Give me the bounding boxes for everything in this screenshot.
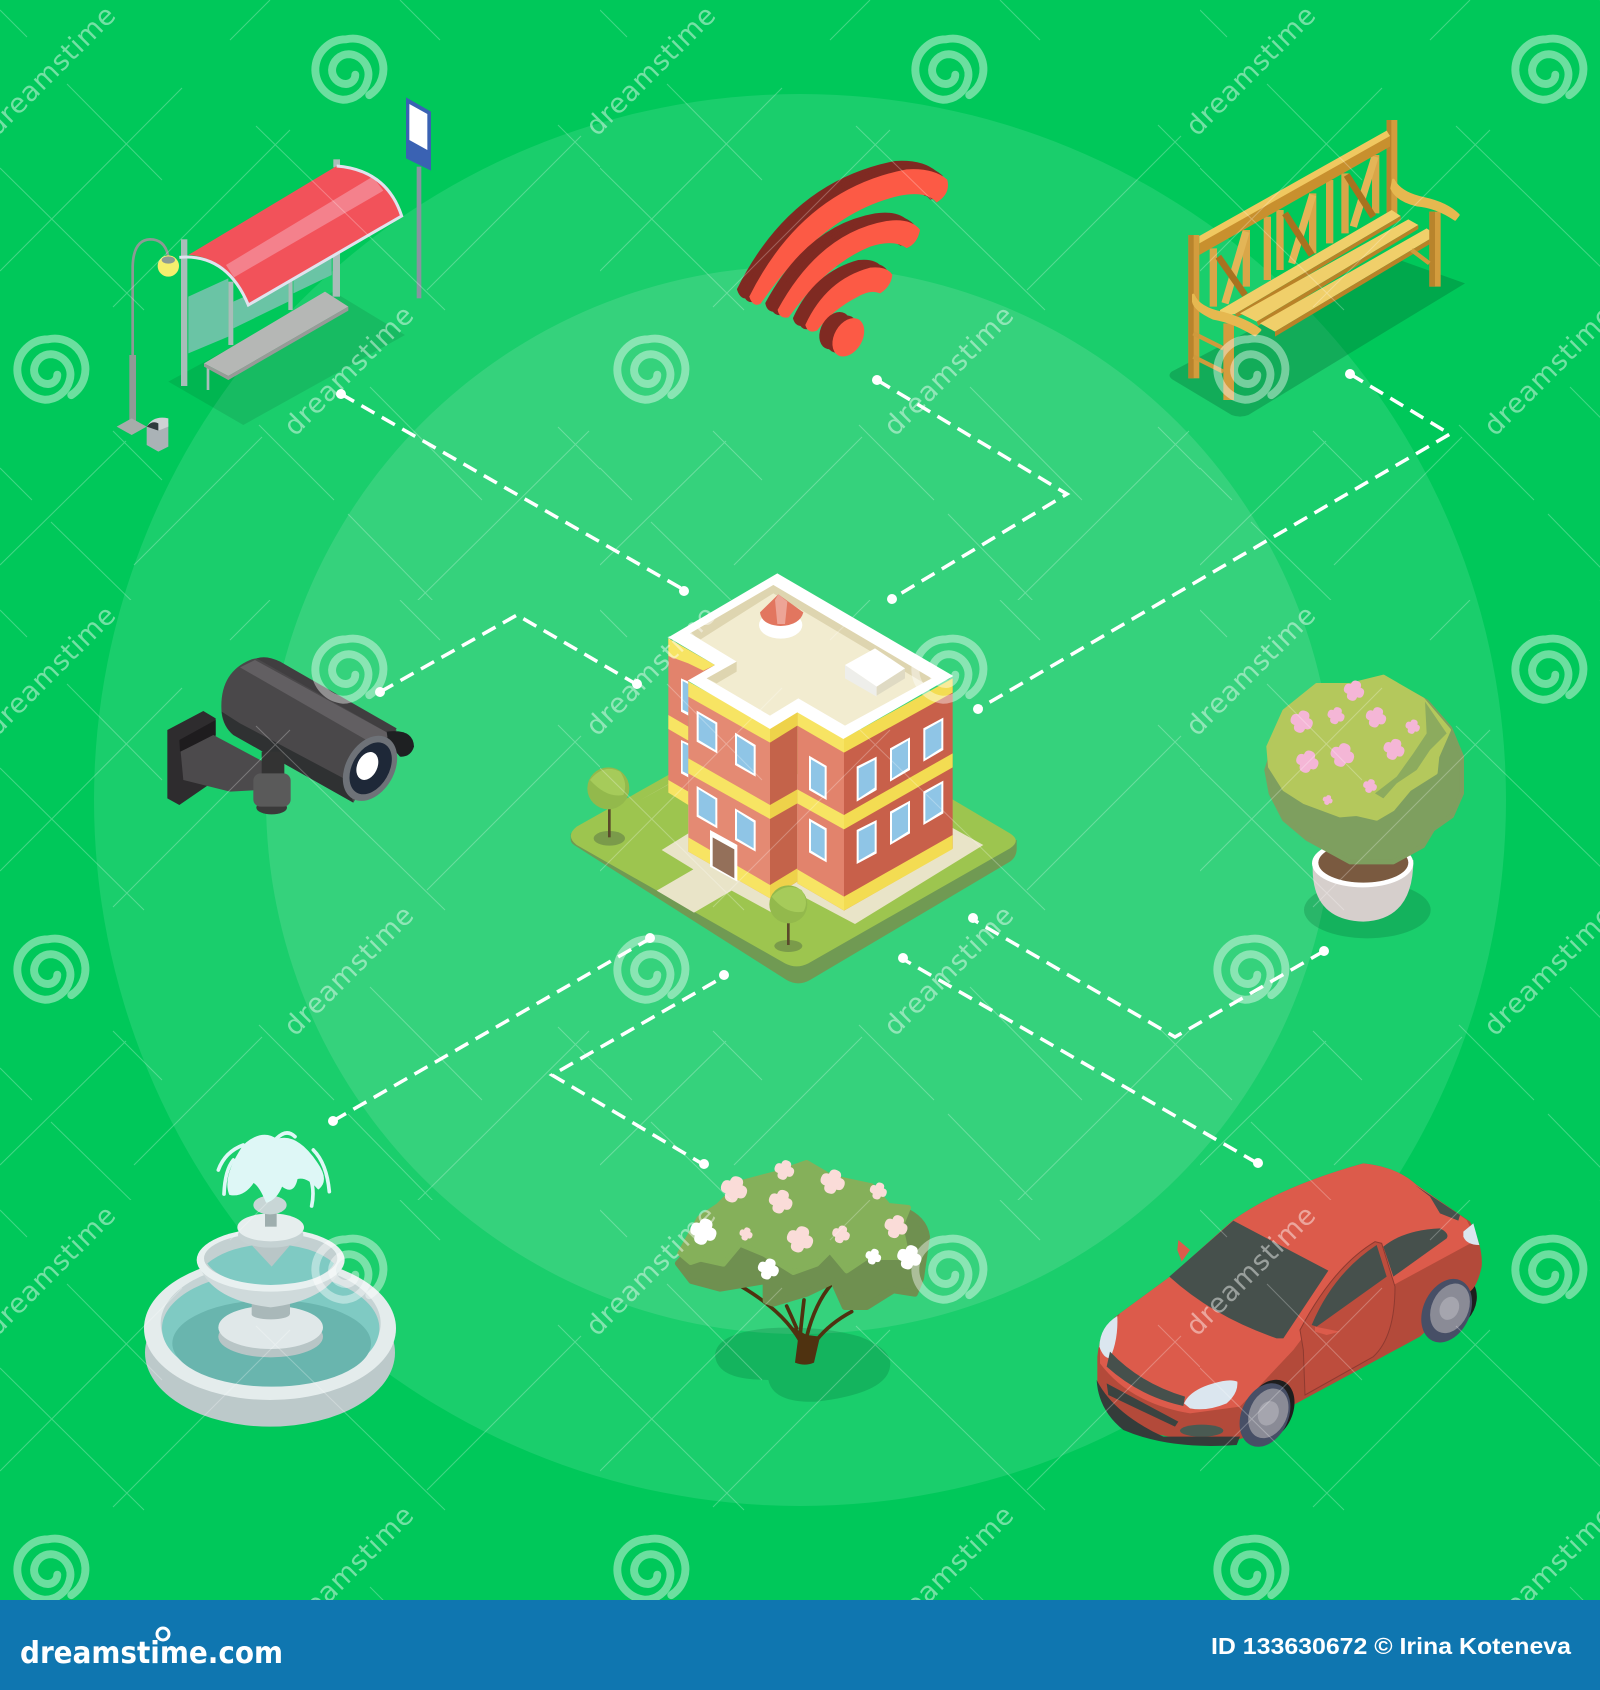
bush crown dark (1267, 678, 1462, 862)
wifi dot (813, 306, 871, 362)
back slats and crosses (1213, 155, 1376, 307)
watermark text: dreamstime (1180, 1200, 1322, 1342)
car rear wheel arch (1425, 1269, 1485, 1335)
bush flowers (1287, 677, 1422, 806)
top rail (1199, 131, 1390, 255)
shelter shadow (168, 292, 405, 425)
street lamp (117, 239, 179, 435)
tree blossoms (686, 1157, 925, 1283)
roof (668, 573, 953, 739)
bush shadow (1304, 882, 1431, 938)
tree shadow (715, 1328, 890, 1402)
roof dome (759, 594, 803, 639)
yellow bands (688, 678, 953, 911)
fountain top tier (237, 1196, 304, 1267)
rear wing (668, 638, 715, 805)
wooden bench (1170, 120, 1465, 417)
mount joint (253, 752, 291, 814)
car rear wheel (1411, 1271, 1482, 1351)
footer logo mark (157, 1628, 169, 1640)
security camera (167, 657, 414, 814)
back posts (1188, 120, 1397, 378)
car lights (1099, 1223, 1479, 1409)
car door (1300, 1242, 1395, 1395)
car windows (1169, 1185, 1460, 1338)
front legs and rails (1193, 212, 1441, 400)
shelter roof (179, 166, 402, 305)
blossoming tree (678, 1157, 927, 1402)
wifi arc medium (767, 214, 919, 317)
windows (697, 711, 943, 864)
connector end dots (328, 369, 1355, 1169)
bush foliage shade (1375, 702, 1447, 798)
watermark text: dreamstime (1180, 0, 1322, 142)
bench shadow (1170, 257, 1465, 417)
upper bowl (197, 1228, 345, 1307)
tree crown dark (678, 1210, 927, 1307)
bush crown light (1268, 677, 1449, 819)
lower basin (144, 1257, 396, 1427)
glass panels (188, 258, 332, 353)
lawn plate (571, 703, 1017, 983)
watermark text: dreamstime (580, 0, 722, 142)
shelter posts (181, 159, 340, 386)
small tree left (587, 767, 629, 846)
bus stop sign (406, 97, 431, 298)
watermark text: dreamstime (278, 900, 420, 1042)
wifi arc small (795, 261, 892, 331)
car mirror (1315, 1327, 1340, 1335)
water spray (218, 1133, 329, 1206)
trash bin (147, 418, 168, 452)
small tree front (769, 885, 807, 952)
footer banner (0, 1600, 1600, 1690)
camera body (221, 657, 414, 803)
footer credit: ID 133630672 © Irina Koteneva (1211, 1633, 1571, 1659)
fountain (144, 1133, 396, 1427)
walls (688, 678, 953, 911)
red car (1097, 1163, 1485, 1455)
watermark text: dreamstime (878, 900, 1020, 1042)
roof vent box (845, 648, 905, 697)
watermark text: dreamstime (878, 1500, 1020, 1642)
camera lens (332, 726, 408, 811)
watermark text: dreamstime (580, 1200, 722, 1342)
watermark text: dreamstime (580, 600, 722, 742)
pedestal (218, 1302, 323, 1357)
tree trunk (742, 1284, 852, 1365)
tree crown light (680, 1163, 908, 1272)
wifi icon (739, 162, 947, 362)
arm rests (1193, 180, 1458, 335)
watermark text: dreamstime (278, 300, 420, 442)
wall bracket (167, 711, 263, 805)
outer circle (94, 94, 1506, 1506)
seat slats (1220, 210, 1437, 337)
car grille and bumper (1097, 1352, 1240, 1446)
footer logo: dreamstime.com (20, 1636, 283, 1671)
watermark text: dreamstime (278, 1500, 420, 1642)
dashed connectors (333, 374, 1450, 1166)
pot (1312, 839, 1413, 922)
watermark text: dreamstime (878, 300, 1020, 442)
car body (1097, 1163, 1482, 1440)
central building on lawn (571, 573, 1017, 983)
potted bush (1267, 677, 1462, 938)
car front wheel (1230, 1372, 1304, 1455)
wifi arc large (739, 162, 947, 304)
watermark text: dreamstime (1180, 600, 1322, 742)
bus stop (117, 97, 431, 452)
inner circle (266, 266, 1334, 1334)
door (710, 830, 737, 882)
shelter bench (204, 292, 348, 390)
